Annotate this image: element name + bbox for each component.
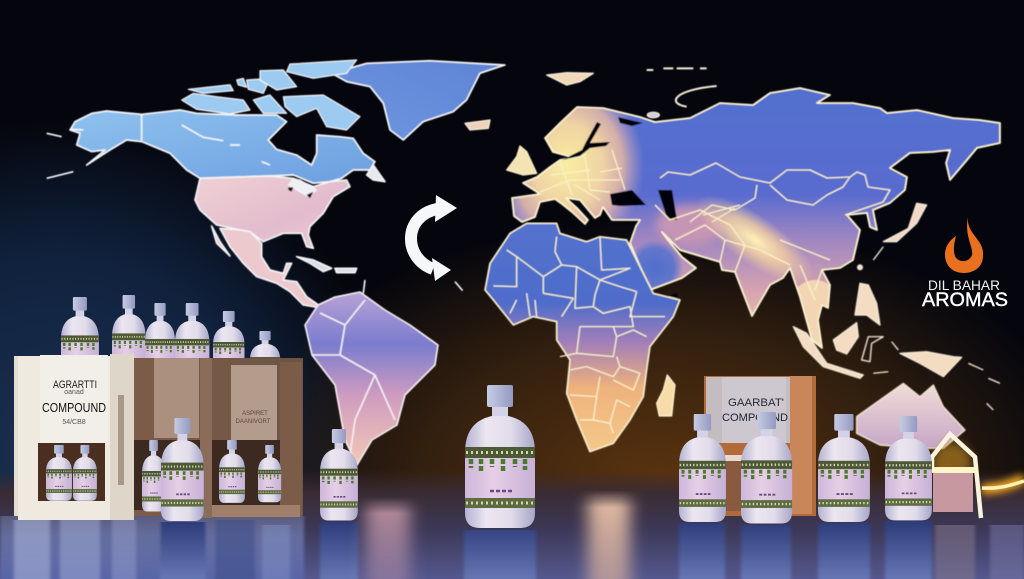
- seas: [562, 117, 677, 220]
- bottle: centre large: [465, 385, 535, 528]
- bottle: right 4: [885, 416, 932, 520]
- Africa: [485, 223, 680, 452]
- crate label: [40, 355, 271, 443]
- circular arrow: [411, 195, 457, 281]
- logo: Dil Bahar Aromas: [922, 217, 1008, 311]
- country borders: [540, 150, 890, 300]
- Iceland and small islands: [465, 68, 717, 130]
- floor with reflections: [0, 470, 1024, 579]
- logo: Dil Bahar Aromas: AROMAS: [922, 290, 1008, 311]
- Madagascar: [657, 375, 675, 416]
- crate label: ASPIRET: [242, 411, 268, 417]
- South America: [305, 292, 438, 465]
- right crate: [704, 376, 816, 516]
- front bottles: [161, 385, 932, 528]
- bottle: right 2: [741, 412, 792, 524]
- crate label: COMPOUND: [42, 400, 106, 415]
- crate label: DAANIVORT: [236, 419, 271, 425]
- icon: flame: [945, 217, 983, 273]
- crate label: AGRARTTI: [53, 379, 97, 391]
- bottle: right 3: [818, 414, 870, 522]
- bottle: crate front: [161, 418, 204, 521]
- African borders: [493, 237, 665, 433]
- Asia Pacific islands: [793, 203, 1000, 448]
- bottle: right 1: [679, 414, 726, 522]
- left crate: [14, 354, 303, 520]
- crate label: 54/CB8: [62, 419, 86, 426]
- North America: [47, 60, 505, 308]
- bottle: left mid: [320, 429, 358, 521]
- arch with light trail: [932, 434, 1024, 518]
- crate label: oanad: [64, 389, 84, 396]
- crate label: GAARBAT': [728, 397, 784, 409]
- right crate: COMPOUND: [722, 412, 788, 424]
- brand name: DIL BAHAR: [928, 277, 1000, 293]
- Eurasia: [510, 86, 1002, 350]
- world map: [47, 60, 1000, 465]
- UK and waterways: [507, 146, 677, 303]
- bottles behind left crate: [61, 295, 280, 391]
